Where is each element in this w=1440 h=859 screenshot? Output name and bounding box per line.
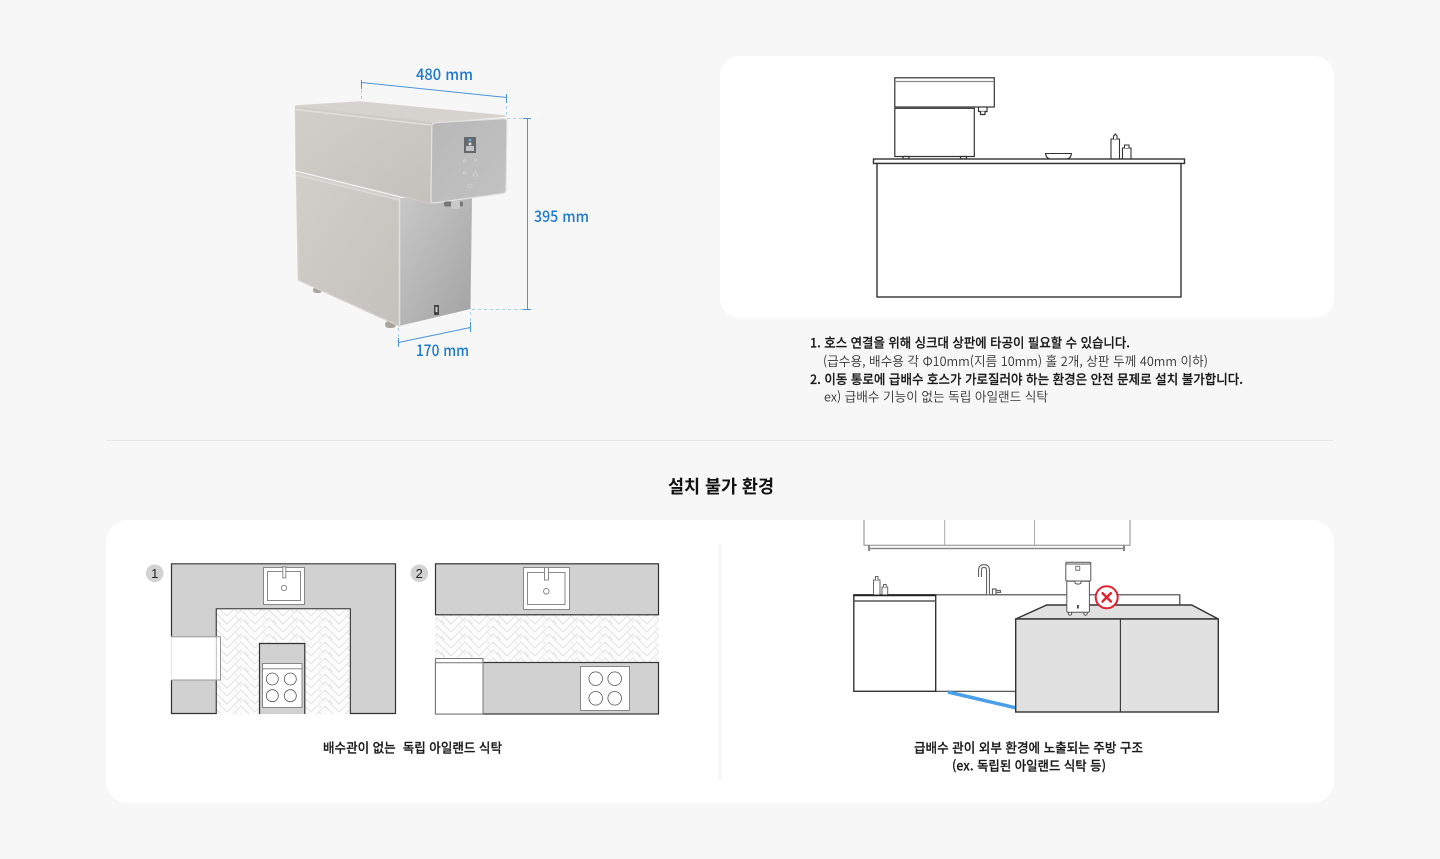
refrigerator <box>171 637 220 680</box>
caption line 1: 급배수 관이 외부 환경에 노출되는 주방 구조 <box>914 738 1143 756</box>
hose <box>948 692 1016 708</box>
caption right <box>914 738 1143 774</box>
badge 2: 2 <box>416 566 423 581</box>
note 2 detail: ex) 급배수 기능이 없는 독립 아일랜드 식탁 <box>824 386 1048 406</box>
width dimension: 480 mm <box>362 63 506 118</box>
caption line 2: (ex. 독립된 아일랜드 식탁 등) <box>952 756 1106 774</box>
icon: kitchen counter <box>874 159 1184 297</box>
bottles <box>874 576 888 594</box>
badge 2 <box>410 564 428 582</box>
depth dimension: 170 mm: 170 mm <box>416 339 469 361</box>
depth dimension: 170 mm <box>398 312 470 361</box>
note 1 detail: (급수용, 배수용 각 Φ10mm(지름 10mm) 홀 2개, 상판 두께 40mm 이하) <box>823 351 1208 370</box>
bottom counter <box>436 662 658 714</box>
icon: bowl and bottles <box>1046 134 1131 159</box>
sink <box>524 568 570 610</box>
purifier front view <box>1066 562 1091 615</box>
badge 1: 1 <box>151 566 158 581</box>
floor tiles <box>435 615 659 663</box>
island with cooktop <box>260 644 305 714</box>
heading: 설치 불가 환경 <box>668 473 774 499</box>
kitchen illustration <box>854 520 1218 712</box>
base cabinet wall <box>936 595 1180 691</box>
upper cabinets <box>864 520 1130 551</box>
note 1: 1. 호스 연결을 위해 싱크대 상판에 타공이 필요할 수 있습니다. <box>810 332 1130 352</box>
icon: not allowed <box>1096 586 1118 608</box>
panel: countertop installation diagram <box>720 56 1334 318</box>
cooktop <box>580 666 630 710</box>
badge 1 <box>146 564 164 582</box>
notes text block <box>810 332 1243 406</box>
panel: non-installable environments <box>106 520 1334 803</box>
left cabinet <box>854 595 936 691</box>
floor plan 2 <box>410 564 659 714</box>
icon: purifier side view <box>895 78 994 159</box>
note 2: 2. 이동 통로에 급배수 호스가 가로질러야 하는 환경은 안전 문제로 설치 불가합니다. <box>810 369 1243 388</box>
icon: water purifier product <box>296 102 507 328</box>
sink <box>264 567 304 604</box>
floor plan 1 <box>146 564 396 714</box>
refrigerator <box>436 658 483 714</box>
island <box>1016 605 1218 712</box>
height dimension: 395 mm <box>472 118 589 310</box>
floor tiles <box>217 609 350 714</box>
caption left: 배수관이 없는 독립 아일랜드 식탁 <box>323 738 502 756</box>
counter U-shape <box>172 564 396 714</box>
faucet <box>980 566 1000 594</box>
product illustration with dimensions <box>296 63 589 361</box>
height dimension: 395 mm: 395 mm <box>534 205 589 227</box>
top counter <box>436 564 658 615</box>
width dimension: 480 mm: 480 mm <box>416 63 473 85</box>
